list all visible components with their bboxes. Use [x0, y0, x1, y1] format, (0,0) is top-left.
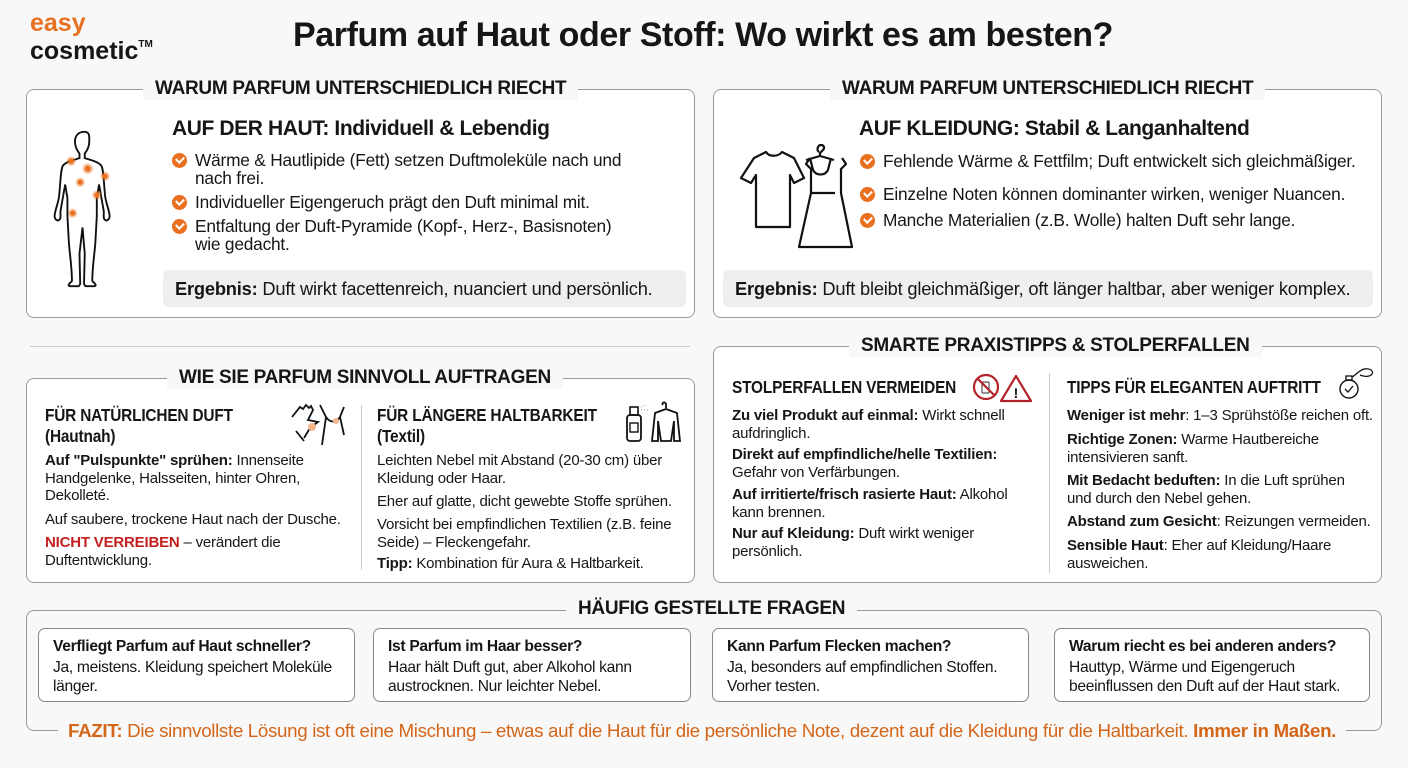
heading: faq: HÄUFIG GESTELLTE FRAGEN [578, 598, 845, 619]
icon: body with pulse points [54, 130, 111, 288]
column: tipps: ausweichen. [1067, 554, 1148, 572]
logo: cosmeticTM [30, 37, 153, 65]
column: längere haltbarkeit: Tipp: Kombination für Aura & Haltbarkeit. [377, 555, 644, 572]
column: stolperfallen: Nur auf Kleidung: Duft wirkt weniger [732, 525, 974, 542]
column: längere haltbarkeit: Vorsicht bei empfindlichen Textilien (z.B. feine [377, 516, 671, 533]
column: tipps: TIPPS FÜR ELEGANTEN AUFTRITT [1067, 377, 1321, 397]
icon: prohibited and warning: ! [1014, 385, 1018, 401]
icon: prohibited and warning [972, 374, 1032, 402]
column: stolperfallen: STOLPERFALLEN VERMEIDEN [732, 377, 956, 397]
bullet list: kleidung: Fehlende Wärme & Fettfilm; Duft entwickelt sich gleichmäßiger. [883, 151, 1356, 171]
subheading: auf der haut: AUF DER HAUT: Individuell & Lebendig [172, 117, 550, 140]
column: längere haltbarkeit [377, 402, 681, 572]
column: natürlicher duft: FÜR NATÜRLICHEN DUFT [45, 405, 233, 425]
column: stolperfallen: Direkt auf empfindliche/helle Textilien: [732, 446, 997, 463]
panel: auf der haut [26, 89, 695, 318]
bullet list: kleidung: Einzelne Noten können dominanter wirken, weniger Nuancen. [883, 184, 1345, 204]
heading: auftragen: WIE SIE PARFUM SINNVOLL AUFTRAGEN [179, 367, 551, 388]
result box: kleidung: Ergebnis: Duft bleibt gleichmäßiger, oft länger haltbar, aber weniger komplex. [735, 278, 1350, 299]
faq card 2: Ist Parfum im Haar besser? [388, 638, 582, 655]
fazit: FAZIT: Die sinnvollste Lösung ist oft eine Mischung – etwas auf die Haut für die persönliche Note, dezent auf die Kleidung für die Haltbarkeit. Immer in Maßen. [68, 720, 1336, 741]
column: stolperfallen [732, 374, 1032, 560]
heading: warum parfum (right): WARUM PARFUM UNTERSCHIEDLICH RIECHT [842, 78, 1253, 99]
logo: easy [30, 9, 86, 37]
column: tipps: und durch den Nebel gehen. [1067, 490, 1251, 506]
column: natürlicher duft: Auf saubere, trockene Haut nach der Dusche. [45, 511, 341, 528]
faq card 1: länger. [53, 678, 98, 695]
result box: haut: Ergebnis: Duft wirkt facettenreich, nuanciert und persönlich. [175, 278, 653, 299]
faq card 1: Ja, meistens. Kleidung speichert Moleküle [53, 659, 332, 676]
panel: wie sie parfum auftragen [26, 378, 695, 583]
column: natürlicher duft: Duftentwicklung. [45, 552, 152, 568]
column: tipps: Mit Bedacht beduften: In die Luft sprühen [1067, 472, 1345, 489]
icon: t-shirt and dress [740, 144, 854, 248]
faq card 4: Hauttyp, Wärme und Eigengeruch [1069, 659, 1295, 676]
column: stolperfallen: aufdringlich. [732, 424, 810, 442]
column: längere haltbarkeit: Leichten Nebel mit Abstand (20-30 cm) über [377, 452, 662, 469]
faq card 3: Vorher testen. [727, 678, 820, 695]
panel: praxistipps & stolperfallen [713, 346, 1382, 583]
faq card 3 [712, 628, 1029, 702]
column: längere haltbarkeit: Eher auf glatte, dicht gewebte Stoffe sprühen. [377, 493, 672, 510]
bullet list: haut: Wärme & Hautlipide (Fett) setzen Duftmoleküle nach und [195, 150, 621, 170]
column: natürlicher duft [45, 404, 345, 568]
bullet list: haut: Entfaltung der Duft-Pyramide (Kopf-, Herz-, Basisnoten) [195, 216, 611, 236]
bullet list: haut: wie gedacht. [195, 234, 290, 254]
result box: haut [163, 270, 686, 307]
column: stolperfallen: Auf irritierte/frisch rasierte Haut: Alkohol [732, 486, 1007, 503]
column: tipps: Sensible Haut: Eher auf Kleidung/Haare [1067, 537, 1331, 554]
column: tipps [1067, 368, 1374, 572]
bullet list: kleidung: Manche Materialien (z.B. Wolle) halten Duft sehr lange. [883, 210, 1295, 230]
icon: wrist and neck [291, 404, 345, 446]
column: tipps: Richtige Zonen: Warme Hautbereiche [1067, 431, 1319, 448]
faq card 3: Kann Parfum Flecken machen? [727, 638, 951, 655]
column: stolperfallen: persönlich. [732, 542, 802, 560]
column: natürlicher duft: (Hautnah) [45, 426, 115, 446]
faq card 1 [38, 628, 355, 702]
faq card 3: Ja, besonders auf empfindlichen Stoffen. [727, 659, 997, 676]
faq card 4: Warum riecht es bei anderen anders? [1069, 638, 1336, 655]
faq card 4: beeinflussen den Duft auf der Haut stark. [1069, 678, 1340, 695]
column: längere haltbarkeit: Kleidung oder Haar. [377, 470, 506, 486]
column: stolperfallen: Gefahr von Verfärbungen. [732, 464, 900, 480]
column: längere haltbarkeit: FÜR LÄNGERE HALTBARKEIT [377, 405, 597, 425]
column: tipps: Abstand zum Gesicht: Reizungen vermeiden. [1067, 513, 1371, 530]
bullet list: haut: nach frei. [195, 168, 264, 188]
column: längere haltbarkeit: (Textil) [377, 426, 425, 446]
panel: auf kleidung [713, 89, 1382, 318]
faq card 4 [1054, 628, 1370, 702]
faq card 2: austrocknen. Nur leichter Nebel. [388, 678, 601, 695]
column: stolperfallen: Zu viel Produkt auf einmal: Wirkt schnell [732, 407, 1005, 424]
column: längere haltbarkeit: Seide) – Fleckengefahr. [377, 534, 531, 550]
column: stolperfallen: kann brennen. [732, 504, 825, 520]
title: Parfum auf Haut oder Stoff: Wo wirkt es am besten? [293, 16, 1113, 54]
heading: praxistipps: SMARTE PRAXISTIPPS & STOLPERFALLEN [861, 335, 1250, 356]
panel: faq [26, 610, 1382, 731]
column: tipps: intensivieren sanft. [1067, 448, 1188, 466]
bullet list: haut: Individueller Eigengeruch prägt den Duft minimal mit. [195, 192, 590, 212]
faq card 1: Verfliegt Parfum auf Haut schneller? [53, 638, 311, 655]
result box: kleidung [723, 270, 1373, 307]
column: natürlicher duft: NICHT VERREIBEN – verändert die [45, 534, 281, 551]
column: tipps: Weniger ist mehr: 1–3 Sprühstöße reichen oft. [1067, 407, 1373, 424]
icon: spray bottle and shirt [626, 402, 681, 442]
faq card 2 [373, 628, 691, 702]
bullet list: haut [172, 150, 621, 254]
faq card 2: Haar hält Duft gut, aber Alkohol kann [388, 659, 632, 676]
bullet list: kleidung [860, 151, 1356, 230]
icon: perfume bottle [1339, 368, 1374, 399]
column: natürlicher duft: Auf "Pulspunkte" sprühen: Innenseite [45, 452, 304, 469]
column: natürlicher duft: Handgelenke, Halsseiten, hinter Ohren, [45, 470, 300, 486]
subheading: auf kleidung: AUF KLEIDUNG: Stabil & Langanhaltend [859, 117, 1249, 140]
column: natürlicher duft: Dekolleté. [45, 487, 110, 504]
heading: warum parfum (left): WARUM PARFUM UNTERSCHIEDLICH RIECHT [155, 78, 566, 99]
logo [30, 9, 153, 65]
